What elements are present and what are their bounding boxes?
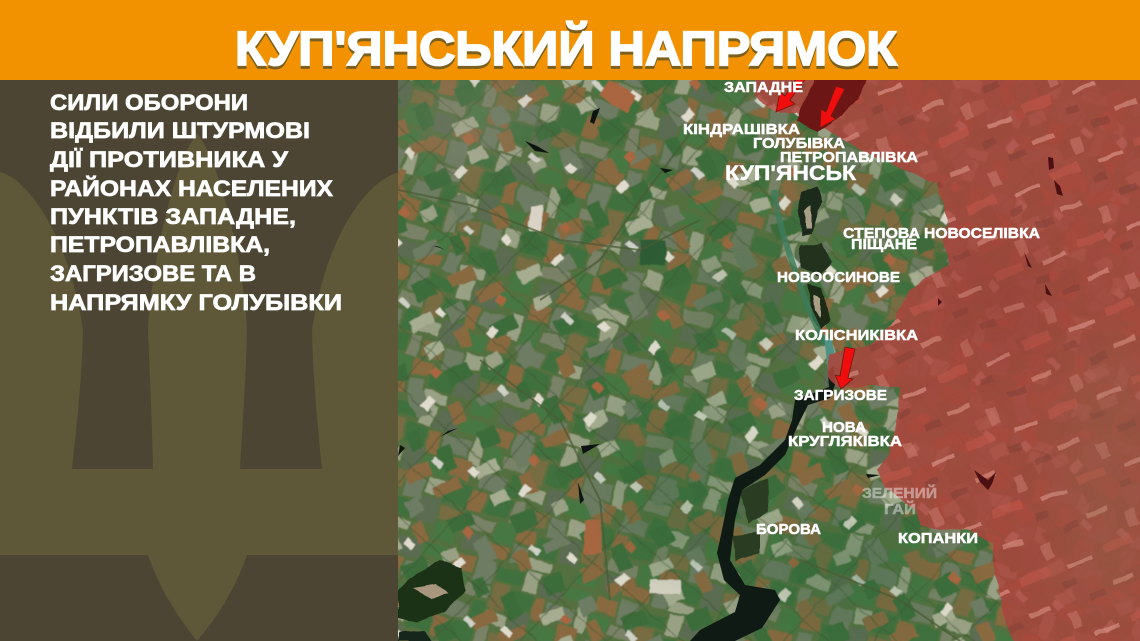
description text: ЗАГРИЗОВЕ ТА В [50, 261, 256, 286]
label Stepova: СТЕПОВА [843, 225, 920, 242]
dark ponds in occupied zone [938, 157, 1063, 490]
forest south-west [398, 560, 466, 641]
header bar [0, 0, 1140, 80]
label Novoosynove: НОВООСИНОВЕ [777, 269, 900, 286]
description text [50, 90, 342, 315]
description text: ВІДБИЛИ ШТУРМОВІ [50, 118, 310, 143]
river upper [774, 190, 826, 345]
label Holubivka: ГОЛУБІВКА [753, 135, 845, 152]
forests near Kupiansk [799, 188, 832, 330]
trident emblem [0, 133, 400, 641]
label Zahryzove: ЗАГРИЗОВЕ [794, 387, 887, 404]
green mottling [400, 80, 930, 630]
label Pishchane: ПІЩАНЕ [851, 236, 917, 253]
description text: ДІЇ ПРОТИВНИКА У [50, 147, 288, 172]
title: КУП'ЯНСЬКИЙ НАПРЯМОК [235, 24, 898, 79]
label Petropavlivka: ПЕТРОПАВЛІВКА [780, 149, 918, 166]
title: КУП'ЯНСЬКИЙ НАПРЯМОК [235, 21, 898, 76]
river Oskil reservoir [690, 345, 835, 641]
description text: ПЕТРОПАВЛІВКА, [50, 232, 270, 257]
label Kupiansk: КУП'ЯНСЬК [725, 162, 856, 185]
label Zelenyi Hai [862, 484, 937, 518]
description text: НАПРЯМКУ ГОЛУБІВКИ [50, 290, 342, 315]
label Borova: БОРОВА [756, 521, 821, 538]
occupied territory overlay [755, 74, 1140, 641]
label Zelenyi Hai: ГАЙ [884, 500, 916, 518]
arrow: toward Zahryzove [835, 347, 855, 389]
label Zapadne: ЗАПАДНЕ [724, 79, 803, 96]
label Zelenyi Hai: ЗЕЛЕНИЙ [862, 484, 937, 502]
dark red contested zone [797, 78, 868, 132]
arrow: toward Zapadne [776, 80, 805, 112]
description text: СИЛИ ОБОРОНИ [50, 90, 248, 115]
ponds [398, 108, 880, 504]
eastern tone shift [932, 260, 1140, 585]
arrow: toward Holubivka [820, 86, 845, 128]
label Kopanky: КОПАНКИ [898, 530, 978, 547]
roads and tree lines [398, 120, 960, 641]
description text: РАЙОНАХ НАСЕЛЕНИХ [50, 176, 333, 201]
label Novoselivka: НОВОСЕЛІВКА [924, 225, 1040, 242]
label Kindrashivka: КІНДРАШІВКА [683, 121, 800, 138]
label Nova: НОВА [822, 419, 866, 436]
left panel [0, 80, 400, 641]
description text: ПУНКТІВ ЗАПАДНЕ, [50, 204, 296, 229]
forest by river [733, 478, 770, 560]
terrain [388, 70, 1140, 641]
label Kruhliakivka: КРУГЛЯКІВКА [788, 433, 902, 450]
label Kolisnykivka: КОЛІСНИКІВКА [795, 327, 918, 344]
satellite map [388, 70, 1140, 641]
map labels [683, 79, 1040, 547]
